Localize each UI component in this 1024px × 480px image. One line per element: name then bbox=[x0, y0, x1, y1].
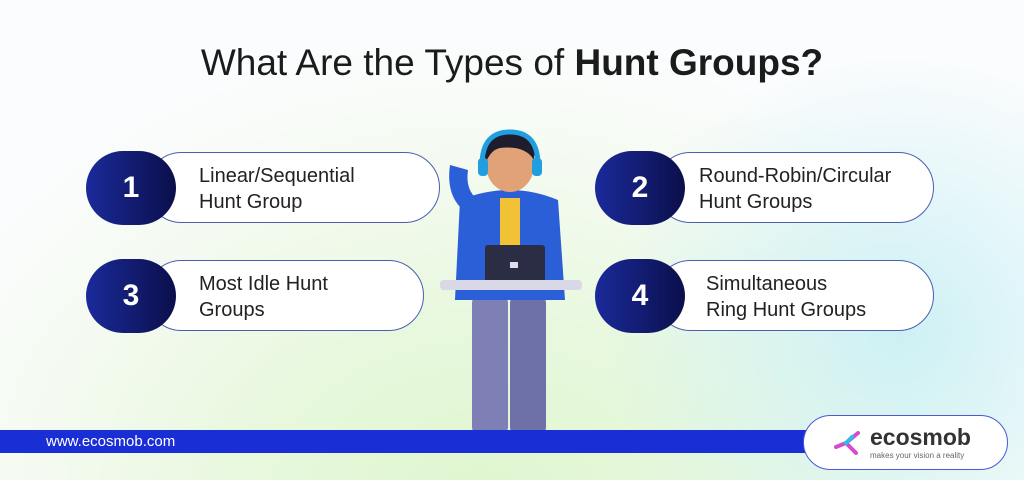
item 1 bbox=[86, 151, 440, 225]
logo pill: makes your vision a reality bbox=[870, 451, 964, 460]
item 2: Hunt Groups bbox=[699, 191, 812, 213]
item 4: 4 bbox=[632, 279, 648, 312]
item 2: Round-Robin/Circular bbox=[699, 165, 891, 187]
item 4: Ring Hunt Groups bbox=[706, 299, 866, 321]
item 3 bbox=[86, 259, 424, 333]
illustration: person with headset and laptop bbox=[440, 130, 582, 430]
item 1: Hunt Group bbox=[199, 191, 302, 213]
title: What Are the Types of Hunt Groups? bbox=[201, 42, 823, 83]
item 2 bbox=[595, 151, 934, 225]
footer bar with url: www.ecosmob.com bbox=[46, 433, 175, 450]
logo pill: ecosmob bbox=[870, 424, 971, 450]
item 1: 1 bbox=[123, 171, 139, 204]
item 1: Linear/Sequential bbox=[199, 165, 355, 187]
item 3: Groups bbox=[199, 299, 265, 321]
item 4 bbox=[595, 259, 934, 333]
footer bar with url bbox=[0, 430, 810, 453]
item 3: Most Idle Hunt bbox=[199, 273, 328, 295]
logo pill bbox=[803, 415, 1008, 470]
item 2: 2 bbox=[632, 171, 648, 204]
item 3: 3 bbox=[123, 279, 139, 312]
logo icon bbox=[834, 430, 860, 456]
item 4: Simultaneous bbox=[706, 273, 827, 295]
